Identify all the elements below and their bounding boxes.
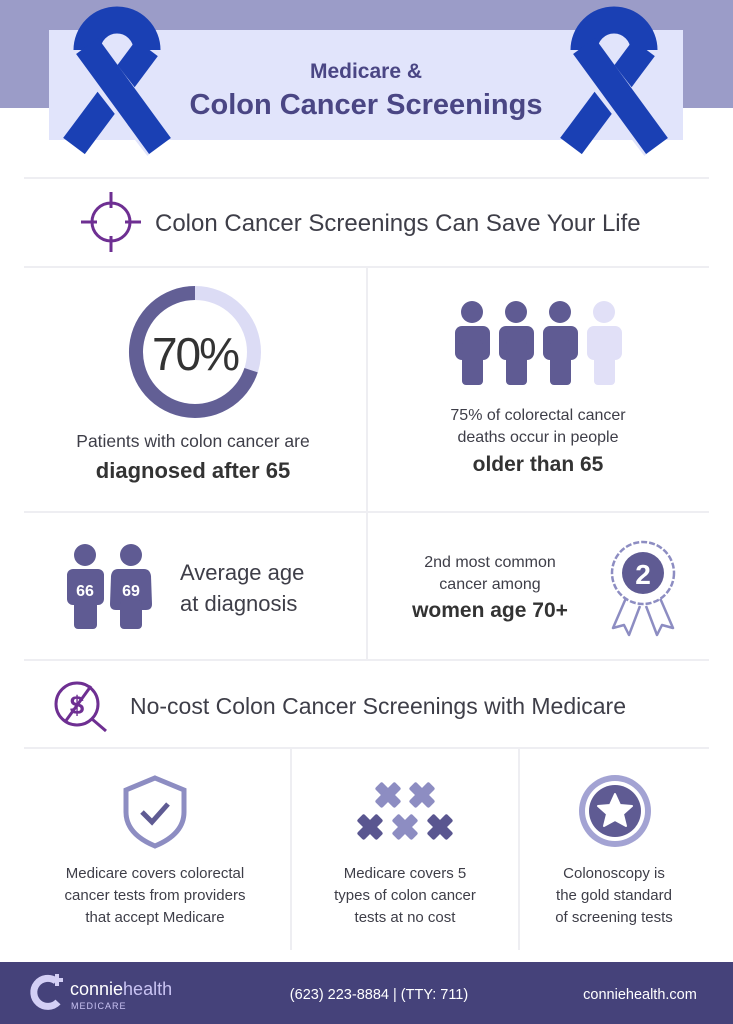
logo: MEDICARE (71, 1001, 127, 1011)
icon: people (455, 301, 622, 385)
title: Medicare & (310, 60, 422, 83)
panel: 75% deaths: 75% of colorectal cancer (450, 407, 626, 424)
icon: shield (126, 778, 184, 846)
icon: crosshair (81, 192, 141, 252)
panel: colonoscopy: Colonoscopy is (563, 865, 665, 882)
website: conniehealth.com (583, 987, 697, 1003)
icon: man 66: 66 (76, 583, 94, 600)
panel: average age: Average age (180, 560, 304, 585)
panel: covers tests (65, 778, 245, 926)
title box (49, 30, 683, 140)
panel: covers tests: Medicare covers colorectal (66, 865, 244, 882)
panel: 70%: diagnosed after 65 (96, 458, 290, 483)
icon: no dollar: $ (70, 690, 85, 720)
header band (0, 0, 733, 108)
icon: ribbon left (74, 20, 160, 146)
panel: 2nd most common: women age 70+ (411, 599, 568, 622)
panel: colonoscopy: of screening tests (555, 909, 673, 926)
icon: man 66 (67, 544, 104, 629)
panel: 70%: 70% (152, 328, 239, 380)
contact: (623) 223-8884 | (TTY: 711) (290, 987, 468, 1003)
footer (0, 962, 733, 1024)
heading: save your life: Colon Cancer Screenings Can Save Your Life (155, 210, 641, 237)
icon: ribbon right (571, 20, 657, 146)
icon: rosette: 2 (635, 559, 651, 590)
icon: no dollar (56, 683, 106, 731)
panel: 2nd most common: 2nd most common (424, 554, 556, 571)
icon: woman 69: 69 (122, 583, 140, 600)
panel: average age (67, 544, 304, 629)
title: Colon Cancer Screenings (190, 89, 542, 121)
panel: 75% deaths (450, 301, 626, 476)
heading: no-cost: No-cost Colon Cancer Screenings with Medicare (130, 693, 626, 719)
panel: 70%: Patients with colon cancer are (76, 431, 310, 451)
icon: crosses (350, 775, 460, 847)
icon: woman 69 (110, 544, 152, 629)
logo (34, 974, 172, 1011)
panel: 2nd most common (411, 542, 674, 635)
donut chart (136, 293, 254, 411)
panel: 5 types: types of colon cancer (334, 887, 476, 904)
panel: covers tests: that accept Medicare (85, 909, 225, 926)
icon: star badge (579, 775, 651, 847)
panel: 5 types: Medicare covers 5 (344, 865, 466, 882)
panel: colonoscopy (555, 775, 673, 926)
panel: 70% (76, 293, 310, 483)
panel: average age: at diagnosis (180, 591, 297, 616)
title (190, 60, 542, 121)
panel: covers tests: cancer tests from providers (65, 887, 245, 904)
panel: 5 types: tests at no cost (355, 909, 456, 926)
logo: conniehealth (70, 979, 172, 999)
icon: rosette (612, 542, 674, 635)
panel: 75% deaths: deaths occur in people (458, 429, 619, 446)
panel: 75% deaths: older than 65 (473, 453, 604, 476)
panel: 2nd most common: cancer among (439, 576, 541, 593)
panel: 5 types (334, 775, 476, 926)
panel: colonoscopy: the gold standard (556, 887, 672, 904)
